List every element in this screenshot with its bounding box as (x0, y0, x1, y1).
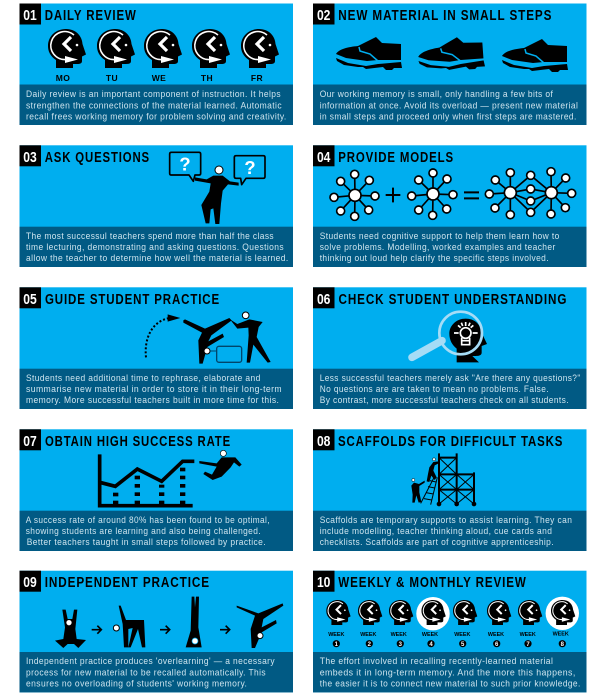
chart: rising line with leaping figure (100, 450, 242, 506)
body text (26, 656, 275, 690)
heading: DAILY REVIEW (45, 8, 137, 24)
body text: embeds it in long-term memory. And the more this happens, (320, 668, 576, 678)
icon: eight week heads with highlighted weeks: 8 (561, 642, 565, 648)
icon: eight week heads with highlighted weeks: 1 (335, 642, 339, 648)
icon: eight week heads with highlighted weeks: 2 (368, 642, 372, 648)
body text: Daily review is an important component of instruction. It helps (26, 89, 281, 100)
number badge (20, 571, 41, 592)
body text: Independent practice produces 'overlearning' — a necessary (26, 656, 275, 667)
panel: 04 provide models (313, 145, 586, 267)
number badge (313, 571, 334, 592)
heading: NEW MATERIAL IN SMALL STEPS (338, 8, 552, 24)
icon: eight week heads with highlighted weeks: 7 (526, 642, 530, 648)
icon: eight week heads with highlighted weeks: 4 (429, 642, 433, 648)
body text (320, 656, 581, 690)
number badge (313, 429, 334, 450)
number badge: 09 (23, 575, 37, 591)
description bar (313, 652, 586, 692)
body text: information at once. Avoid its overload — present new material (320, 100, 578, 111)
body text: time lecturing, demonstrating and asking questions. Questions (26, 242, 284, 253)
icon: workers on ladder and scaffold (411, 453, 476, 506)
icon: eight week heads with highlighted weeks: WEEK (520, 632, 536, 638)
icon: five heads with weekday labels: MO (56, 73, 70, 83)
body text: in small steps and proceed only when first steps are mastered. (320, 111, 577, 122)
number badge (20, 287, 41, 308)
heading: PROVIDE MODELS (338, 150, 454, 166)
body text (320, 515, 572, 548)
panel: 10 weekly and monthly review (313, 571, 586, 692)
icon: five heads with weekday labels: TH (201, 73, 213, 83)
icon: three shoes (336, 35, 568, 73)
body text (320, 231, 560, 264)
body text (26, 89, 287, 122)
number badge: 07 (23, 434, 37, 450)
number badge (313, 4, 334, 24)
body text: The effort involved in recalling recently-learned material (320, 656, 553, 667)
body text: Scaffolds are temporary supports to assist learning. They can (320, 515, 572, 526)
body text: By contrast, more successful teachers check on all students. (320, 395, 569, 406)
number badge: 03 (23, 150, 37, 166)
description bar (20, 84, 293, 125)
body text: thinking out loud help clarify the specific steps involved. (320, 253, 549, 264)
number badge: 04 (317, 150, 330, 166)
icon: five heads with weekday labels: FR (251, 73, 263, 83)
icon: teacher guiding student handstand (146, 312, 271, 364)
description bar (20, 369, 293, 409)
icon: four handstand stages with arrows (55, 597, 283, 648)
icon: eight week heads with highlighted weeks: WEEK (391, 632, 407, 638)
icon: eight week heads with highlighted weeks: 5 (461, 642, 465, 648)
panel: 01 daily review (20, 4, 293, 125)
panel: 09 independent practice (20, 571, 293, 692)
icon: person with question bubbles: ? (244, 157, 256, 178)
body text: Students need cognitive support to help them learn how to (320, 231, 560, 242)
icon: person with question bubbles (170, 152, 265, 224)
body text (26, 231, 289, 264)
number badge (313, 145, 334, 166)
icon: concept networks combining (330, 168, 576, 220)
icon: person with question bubbles: ? (179, 154, 191, 175)
description bar (313, 369, 586, 409)
icon: eight week heads with highlighted weeks: 6 (495, 642, 499, 648)
heading: GUIDE STUDENT PRACTICE (45, 292, 220, 308)
body text: summarise new material in order to store it in their long-term (26, 384, 282, 395)
icon: five heads with weekday labels: WE (152, 73, 166, 83)
body text: Better teachers taught in small steps followed by practice. (27, 537, 266, 548)
number badge: 08 (317, 434, 330, 450)
icon: eight week heads with highlighted weeks: WEEK (454, 632, 470, 638)
body text: The most successul teachers spend more than half the class (26, 231, 274, 242)
description bar (20, 511, 293, 551)
body text: solve problems. Modelling, worked examples and teacher (320, 242, 556, 253)
number badge (313, 287, 334, 308)
icon: eight week heads with highlighted weeks: WEEK (328, 632, 344, 638)
number badge: 05 (23, 292, 37, 308)
body text (26, 515, 270, 548)
icon: eight week heads with highlighted weeks: 3 (399, 642, 403, 648)
body text: No questions are are taken to mean no problems. False. (320, 384, 549, 395)
body text: process for new material to be recalled automatically. This (26, 668, 266, 678)
body text: include modelling, teacher thinking aloud, cue cards and (320, 526, 552, 537)
body text: strengthen the connections of the material learned. Automatic (26, 100, 282, 111)
panel: 05 guide student practice (20, 287, 293, 409)
number badge (20, 145, 41, 166)
icon: eight week heads with highlighted weeks: WEEK (360, 632, 376, 638)
description bar (313, 511, 586, 551)
icon: eight week heads with highlighted weeks: WEEK (553, 632, 569, 638)
body text: A success rate of around 80% has been found to be optimal, (26, 515, 270, 526)
number badge (20, 4, 41, 24)
body text (26, 373, 282, 406)
heading: WEEKLY & MONTHLY REVIEW (338, 575, 527, 591)
icon: eight week heads with highlighted weeks (326, 597, 579, 648)
icon: eight week heads with highlighted weeks: WEEK (422, 632, 438, 638)
description bar (20, 652, 293, 692)
panel: 06 check student understanding (313, 287, 586, 409)
icon: eight week heads with highlighted weeks: WEEK (488, 632, 504, 638)
body text: showing students are learning and also being challenged. (26, 526, 261, 537)
number badge (20, 429, 41, 450)
description bar (20, 227, 293, 267)
icon: magnifier over head with light bulb (412, 312, 487, 362)
number badge: 02 (317, 8, 330, 24)
body text: recall frees working memory for problem solving and creativity. (26, 111, 287, 122)
body text: allow the teacher to determine how well the material is learned. (26, 253, 289, 264)
icon: five heads with weekday labels (48, 29, 279, 83)
number badge: 10 (317, 575, 330, 591)
heading: INDEPENDENT PRACTICE (45, 575, 210, 591)
panel: 07 obtain high success rate (20, 429, 293, 551)
number badge: 06 (317, 292, 330, 308)
number badge: 01 (23, 8, 37, 24)
heading: OBTAIN HIGH SUCCESS RATE (45, 434, 231, 450)
body text: ensures no overloading of students' working memory. (26, 679, 247, 690)
description bar (313, 227, 586, 267)
body text: Our working memory is small, only handling a few bits of (320, 89, 553, 100)
body text: checklists. Scaffolds are part of cognitive apprenticeship. (320, 537, 554, 548)
body text (320, 373, 581, 406)
heading: ASK QUESTIONS (45, 150, 150, 166)
panel: 02 new material in small steps (313, 4, 586, 125)
body text: memory. More successful teachers built in more time for this. (26, 395, 279, 406)
panel: 03 ask questions (20, 145, 293, 267)
description bar (313, 84, 586, 125)
body text: Students need additional time to rephrase, elaborate and (26, 373, 261, 384)
panel: 08 scaffolds for difficult tasks (313, 429, 586, 551)
body text (320, 89, 578, 122)
icon: five heads with weekday labels: TU (106, 73, 118, 83)
